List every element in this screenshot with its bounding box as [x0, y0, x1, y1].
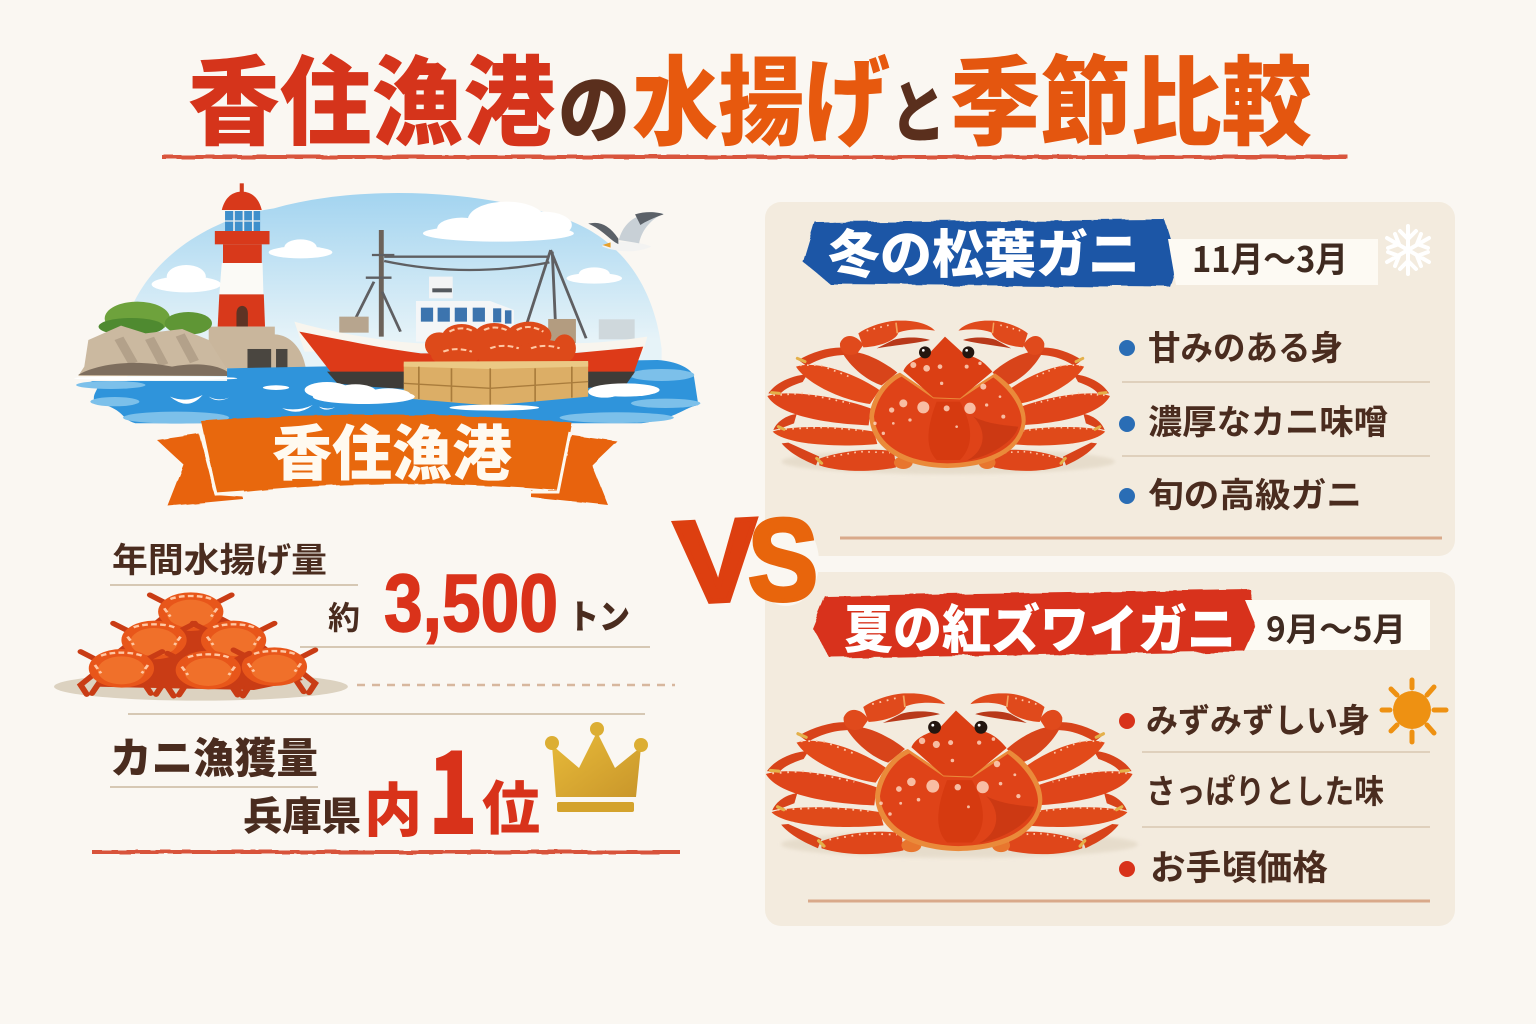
clouds — [152, 202, 622, 292]
seagull — [593, 212, 664, 251]
panel: summer red snow crab — [765, 572, 1455, 926]
ribbon banner: 香住漁港 — [157, 406, 617, 506]
stat: crab catch ranking: カニ漁獲量 — [110, 725, 318, 786]
stat: crab catch ranking: 位 — [482, 762, 540, 846]
harbor illustration — [74, 183, 700, 424]
title: 香住漁港 — [188, 24, 555, 165]
icon: snowflake — [1387, 226, 1429, 274]
stat: crab catch ranking: 1 — [428, 705, 478, 867]
title: と — [890, 58, 946, 157]
title: 水揚げ — [632, 24, 890, 165]
rocky shore — [78, 302, 306, 376]
icon: sun — [1382, 680, 1446, 742]
panel: winter matsuba crab — [765, 202, 1455, 556]
stat: crab catch ranking: 内 — [364, 764, 422, 848]
title: の — [558, 49, 630, 159]
stat: annual landings: 3,500 — [384, 558, 558, 649]
title — [188, 24, 1312, 165]
stat: annual landings — [110, 533, 650, 649]
features: summer: みずみずしい身 — [1146, 694, 1370, 742]
season tag: winter: 11月～3月 — [1192, 232, 1348, 283]
VS mark — [673, 494, 819, 628]
season tag: summer: 9月～5月 — [1266, 603, 1406, 651]
bottom rule left — [92, 850, 680, 854]
icon: crown — [545, 722, 648, 812]
illustration: snow crab — [767, 321, 1115, 474]
lighthouse — [215, 183, 270, 327]
ribbon banner: 香住漁港: 香住漁港 — [272, 406, 512, 493]
features: winter: 濃厚なカニ味噌 — [1148, 395, 1388, 444]
VS mark: V — [673, 494, 761, 628]
icon: pile of crabs — [54, 592, 348, 701]
stat: annual landings: 年間水揚げ量 — [112, 533, 327, 582]
foam — [74, 376, 660, 411]
features: winter — [1119, 321, 1430, 517]
illustration: red snow crab — [766, 693, 1138, 858]
title: 季節比較 — [950, 24, 1312, 165]
title underline — [162, 155, 1348, 159]
stat: annual landings: トン — [568, 590, 630, 639]
features: winter: 旬の高級ガニ — [1148, 468, 1362, 517]
stat: crab catch ranking: 兵庫県 — [243, 786, 361, 842]
sea — [76, 360, 700, 424]
stat: annual landings: 約 — [328, 593, 360, 639]
features: summer — [1119, 694, 1430, 891]
features: summer: さっぱりとした味 — [1146, 765, 1384, 813]
fishing boat — [294, 230, 647, 391]
features: winter: 甘みのある身 — [1148, 321, 1343, 370]
heading banner: winter: 冬の松葉ガニ — [828, 213, 1140, 288]
heading banner: summer: 夏の紅ズワイガニ — [844, 588, 1236, 663]
stat: crab catch ranking — [110, 705, 540, 867]
features: summer: お手頃価格 — [1150, 840, 1328, 891]
VS mark: S — [748, 495, 818, 625]
catch and crate — [404, 322, 588, 406]
